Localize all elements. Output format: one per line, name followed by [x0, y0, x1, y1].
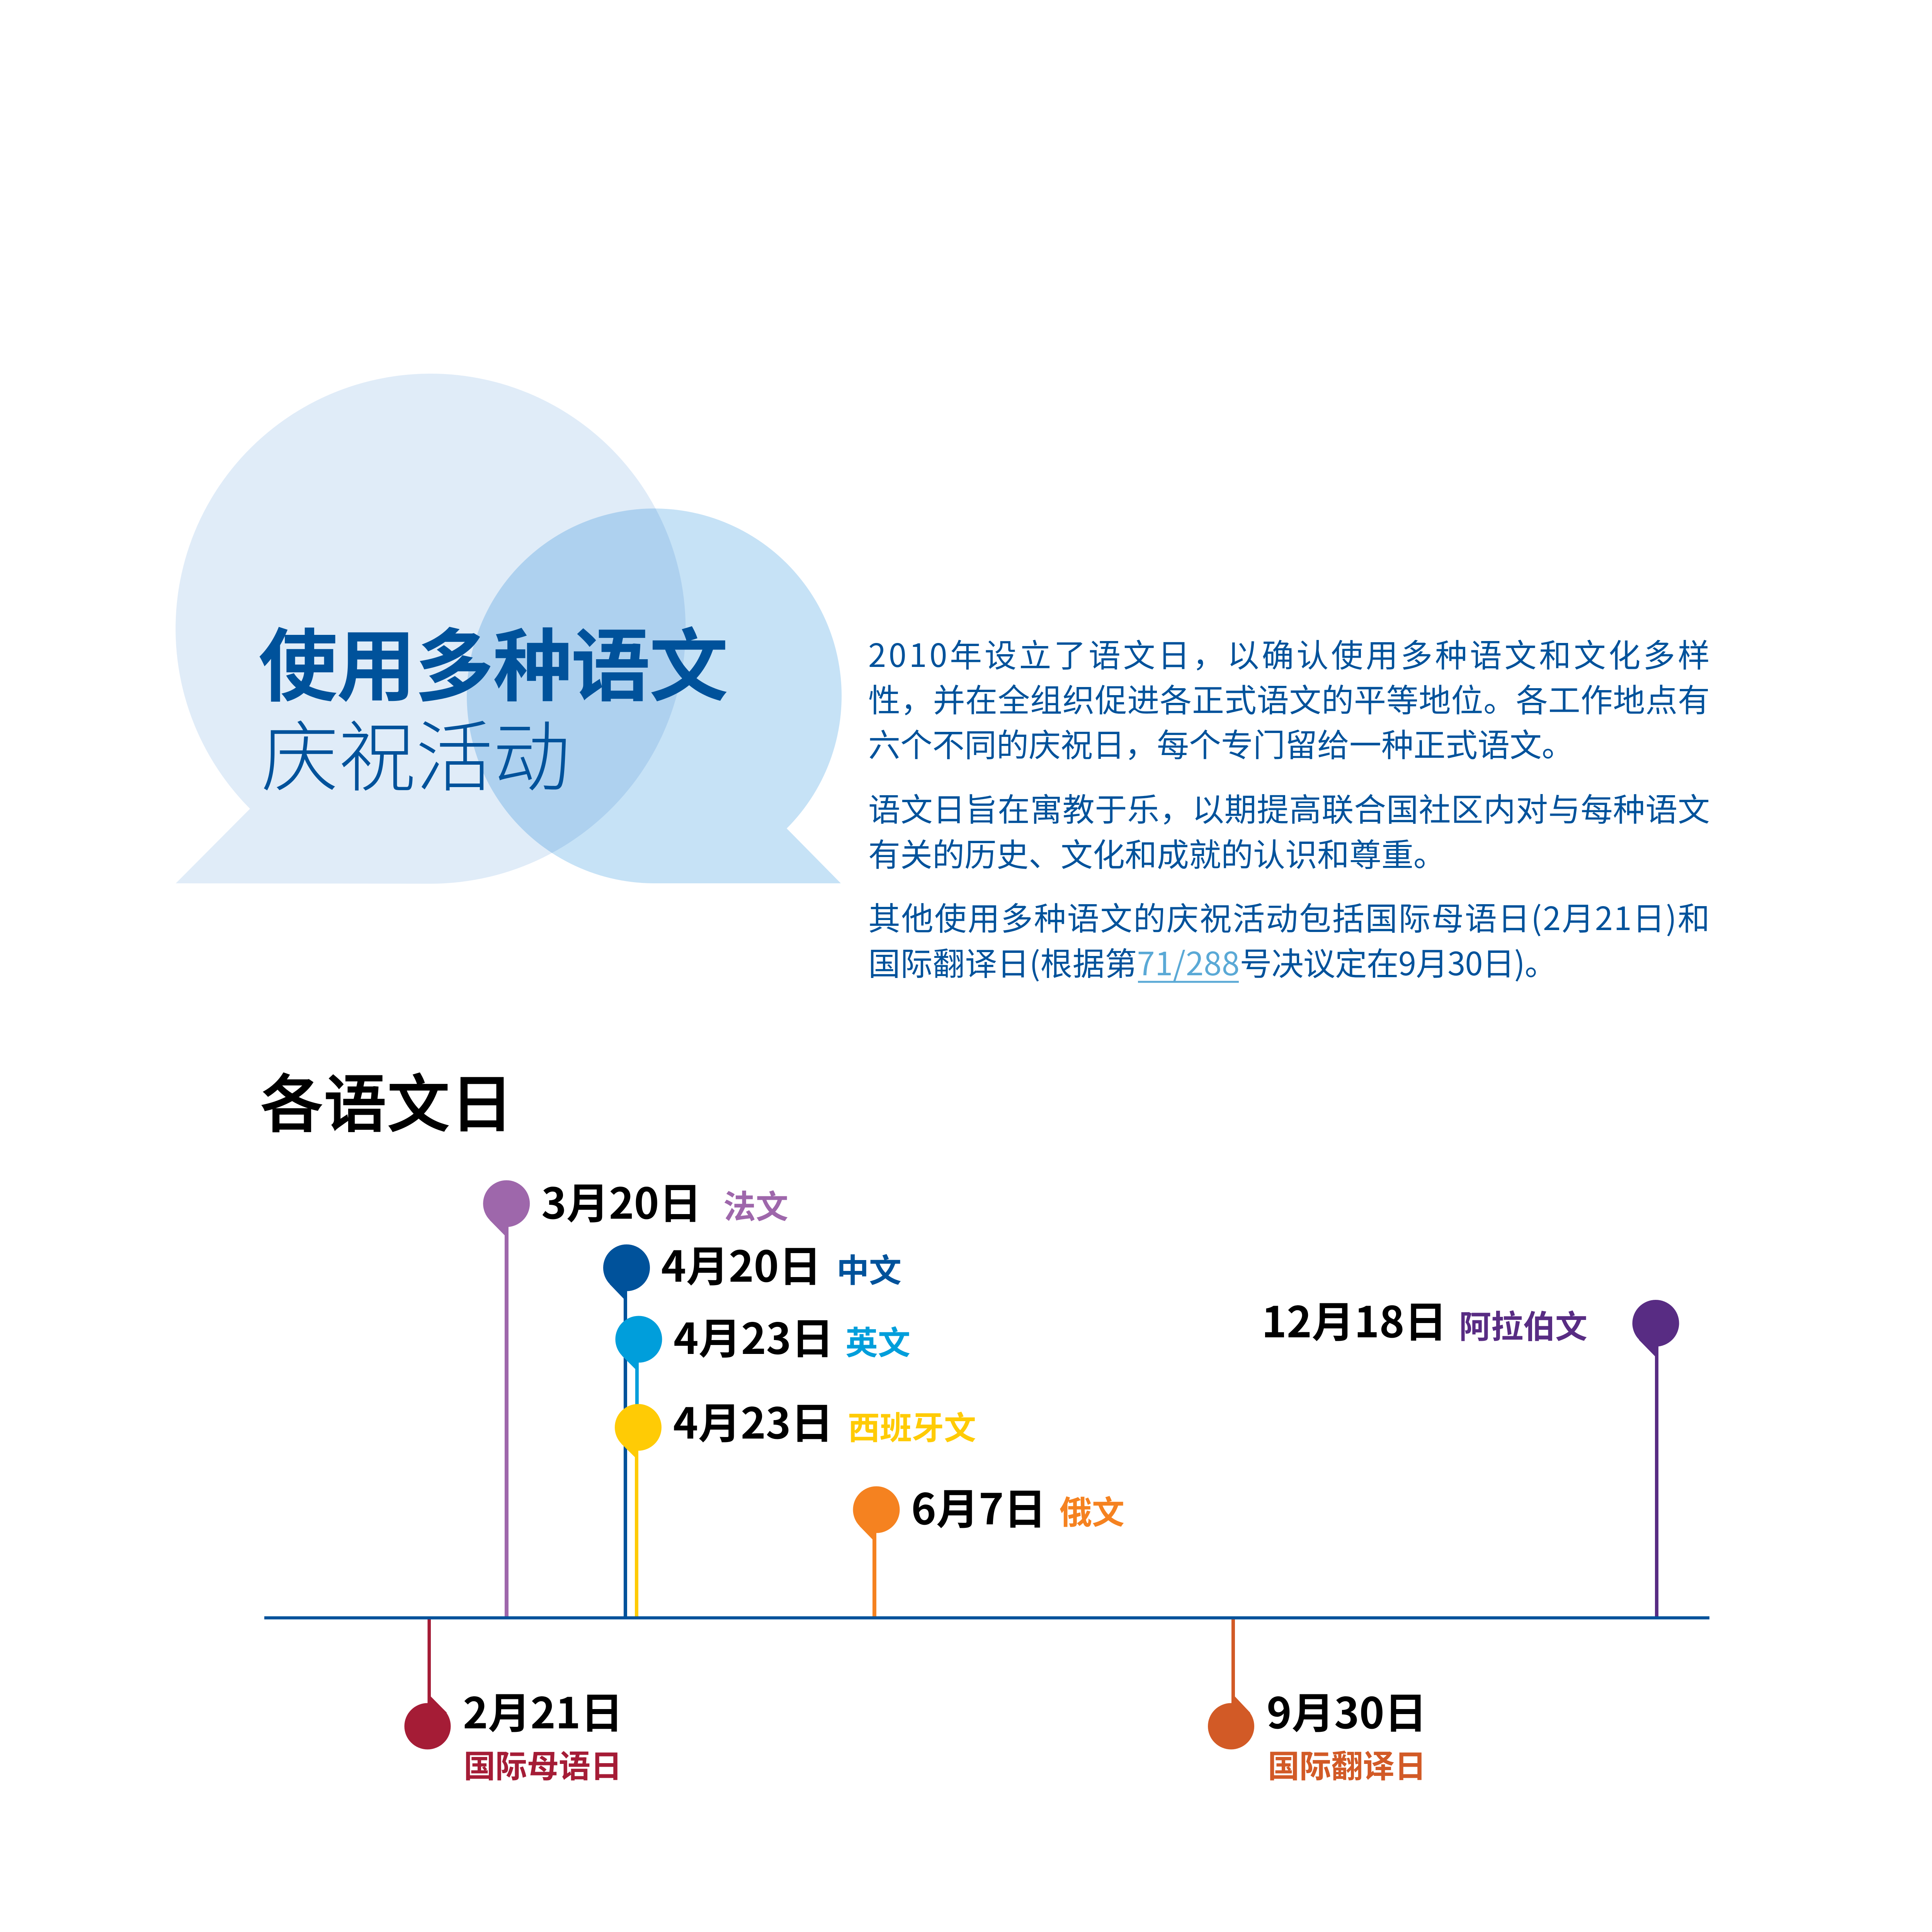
label: Russian: 俄文	[1060, 1487, 1124, 1534]
label: French: 3月20日	[541, 1169, 702, 1231]
pin: English	[615, 1316, 662, 1410]
label: Arabic: 12月18日	[1262, 1288, 1447, 1350]
text block: introduction: 有关的历史、文化和成就的认识和尊重。	[868, 829, 1446, 876]
text block: introduction: 2010年设立了语文日，以确认使用多种语文和文化多样	[868, 630, 1710, 676]
label: Arabic	[1262, 1288, 1587, 1350]
label: English	[673, 1304, 910, 1366]
timeline axis	[264, 1616, 1709, 1619]
label: Chinese: 4月20日	[661, 1232, 821, 1294]
text block: introduction: 其他使用多种语文的庆祝活动包括国际母语日(2月21日)和	[868, 893, 1710, 939]
pin: French	[483, 1180, 530, 1616]
label: International Mother Language Day	[463, 1679, 623, 1787]
pin: International Translation Day	[1208, 1619, 1254, 1750]
pin: International Mother Language Day	[404, 1619, 451, 1750]
label: French	[541, 1169, 788, 1231]
icon: blue speech bubble	[467, 509, 842, 883]
label: International Translation Day	[1267, 1679, 1427, 1787]
icon: light speech bubble	[175, 374, 685, 884]
label: International Translation Day: 国际翻译日	[1268, 1741, 1426, 1787]
pin: Arabic	[1632, 1300, 1679, 1616]
label: Russian: 6月7日	[911, 1475, 1046, 1537]
text block: introduction: 六个不同的庆祝日，每个专门留给一种正式语文。	[868, 719, 1574, 766]
panel: speech bubbles	[175, 374, 842, 884]
heading: language days: 各语文日	[260, 1054, 513, 1145]
label: Chinese: 中文	[837, 1245, 901, 1292]
text block: introduction	[868, 630, 1710, 985]
label: International Translation Day: 9月30日	[1267, 1679, 1427, 1741]
label: Spanish	[673, 1389, 976, 1451]
title: 庆祝活动	[261, 695, 570, 807]
label: Arabic: 阿拉伯文	[1459, 1301, 1587, 1347]
label: French: 法文	[723, 1181, 788, 1228]
title: 使用多种语文	[259, 603, 728, 718]
text block: introduction: 国际翻译日(根据第71/288号决议定在9月30日)。	[868, 938, 1556, 985]
pin: Spanish	[615, 1404, 662, 1616]
label: International Mother Language Day: 2月21日	[463, 1679, 623, 1741]
label: Chinese	[661, 1232, 901, 1294]
text block: introduction: 语文日旨在寓教于乐，以期提高联合国社区内对与每种语文	[868, 784, 1710, 830]
title	[259, 603, 728, 807]
label: Spanish: 西班牙文	[848, 1402, 976, 1449]
label: Spanish: 4月23日	[673, 1389, 833, 1451]
label: International Mother Language Day: 国际母语日	[464, 1741, 622, 1787]
label: English: 4月23日	[673, 1304, 834, 1366]
pin: Russian	[853, 1486, 900, 1616]
label: English: 英文	[845, 1317, 910, 1364]
text block: introduction: 性，并在全组织促进各正式语文的平等地位。各工作地点有	[868, 675, 1710, 721]
label: Russian	[911, 1475, 1124, 1537]
pin: Chinese	[603, 1244, 650, 1616]
